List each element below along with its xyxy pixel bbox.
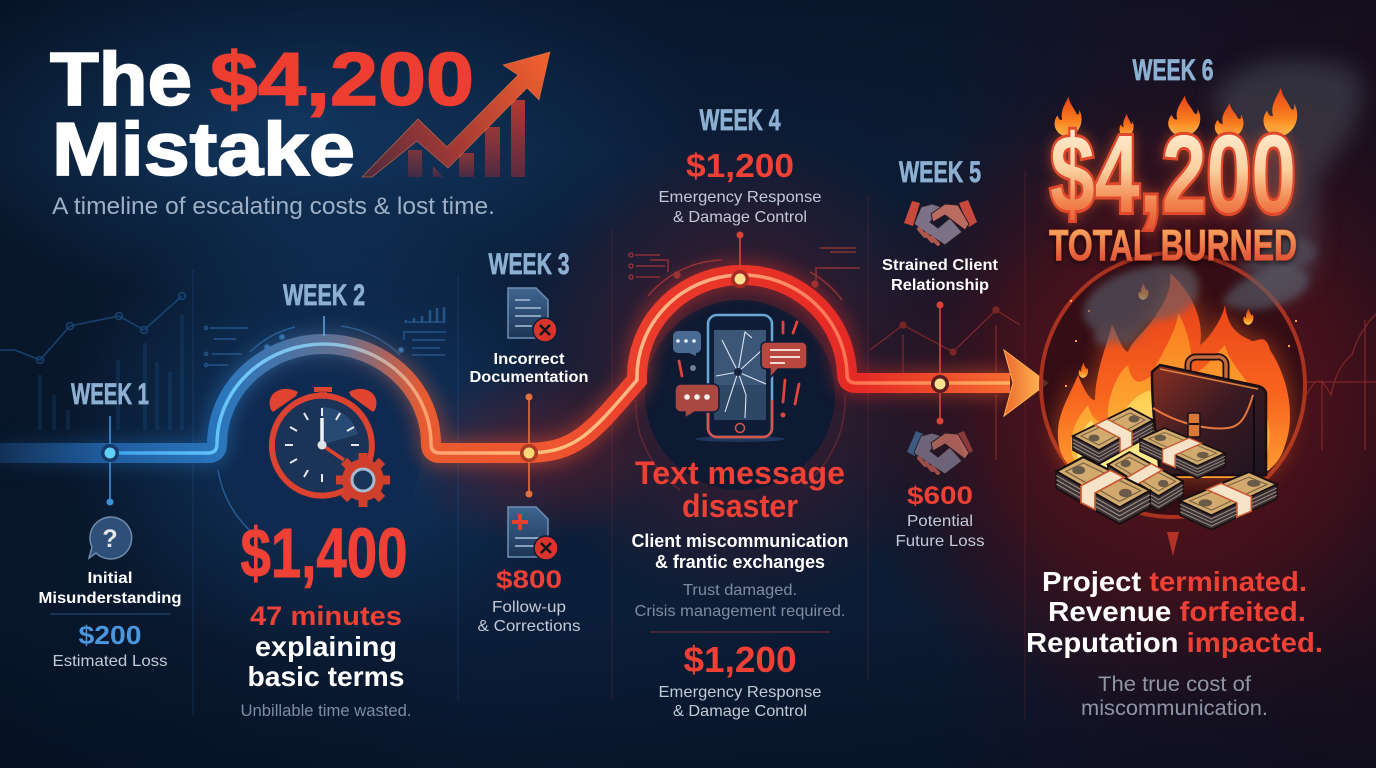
week 1: Estimated Loss xyxy=(52,653,168,670)
week 3 xyxy=(470,248,588,635)
icon: broken phone with chat bubbles xyxy=(673,315,807,442)
outcome text: Revenue forfeited. xyxy=(1048,596,1306,627)
node xyxy=(520,394,538,498)
week 3: Documentation xyxy=(470,369,588,386)
node xyxy=(101,416,119,506)
week 4: Emergency Response xyxy=(658,189,822,206)
title: $4,200 xyxy=(210,37,474,121)
icon: question bubble xyxy=(89,517,132,559)
icon: document with x xyxy=(508,288,557,342)
node xyxy=(931,302,949,424)
background chart: week 5 and 6 xyxy=(870,307,1376,460)
ring xyxy=(1041,253,1305,517)
background chart: week 4 xyxy=(629,248,860,490)
icon: clock with gear xyxy=(270,387,390,507)
week 2: WEEK 2 xyxy=(283,279,365,312)
icon: briefcase xyxy=(1152,357,1266,475)
week 2: basic terms xyxy=(248,661,404,692)
week 1: Initial xyxy=(88,570,132,587)
week 4: WEEK 4 xyxy=(700,104,781,137)
week 4: Trust damaged. xyxy=(683,582,797,599)
week 6: The true cost of xyxy=(1098,673,1251,696)
week 4: & frantic exchanges xyxy=(655,552,825,572)
week 5: Potential xyxy=(907,513,973,530)
week 5 xyxy=(882,156,999,550)
background chart: week 2 xyxy=(204,307,446,535)
icon: handshake faded xyxy=(907,431,973,474)
icon: money stacks xyxy=(1056,408,1277,530)
week 2 xyxy=(240,279,412,720)
week 4: disaster xyxy=(682,488,798,524)
week 1: WEEK 1 xyxy=(71,378,149,411)
icon: flames on total xyxy=(1055,88,1297,139)
week 4 xyxy=(632,104,848,720)
week 4: $1,200 xyxy=(684,639,796,680)
week 2: Unbillable time wasted. xyxy=(240,701,412,720)
week 1: $200 xyxy=(78,620,142,650)
title arrow graphic xyxy=(362,52,550,177)
week 4: Crisis management required. xyxy=(634,603,846,620)
title xyxy=(50,37,550,220)
week 3: Follow-up xyxy=(492,599,566,616)
subtitle: A timeline of escalating costs & lost time. xyxy=(52,193,495,220)
week 2: explaining xyxy=(255,631,397,662)
smoke top xyxy=(1215,60,1361,305)
icon: document with plus and x xyxy=(508,507,558,560)
timeline path xyxy=(0,275,1010,453)
week 4: Text message xyxy=(635,455,845,491)
week 6: WEEK 6 xyxy=(1132,54,1214,87)
smoke over flames xyxy=(1083,237,1318,345)
week 5: Relationship xyxy=(891,277,989,294)
icon: gear xyxy=(336,453,390,507)
week 1: Misunderstanding xyxy=(38,590,182,607)
week 2: 47 minutes xyxy=(250,601,402,631)
week 4: & Damage Control xyxy=(673,703,807,720)
outcome text: Project terminated. xyxy=(1042,566,1307,597)
week 4: Client miscommunication xyxy=(632,531,848,551)
week 6 xyxy=(1026,54,1361,720)
week 3: Incorrect xyxy=(494,351,565,368)
week 3: WEEK 3 xyxy=(488,248,570,281)
week 1 xyxy=(38,378,182,670)
title: Mistake xyxy=(52,107,355,191)
timeline arrow head xyxy=(1004,350,1048,416)
icon: handshake xyxy=(904,200,977,245)
icon: big flames xyxy=(1058,273,1297,478)
node xyxy=(731,232,749,288)
week 4: Emergency Response xyxy=(658,684,822,701)
week 4: & Damage Control xyxy=(673,209,807,226)
dark disc: clock xyxy=(227,358,421,552)
dark disc: phone xyxy=(645,300,835,490)
outcome text: Reputation impacted. xyxy=(1026,627,1323,658)
week 3: & Corrections xyxy=(478,618,580,635)
week 3: $800 xyxy=(496,566,562,594)
week 5: WEEK 5 xyxy=(899,156,981,189)
week 5: Strained Client xyxy=(882,257,999,274)
icon: question bubble: ? xyxy=(102,525,118,553)
week 2: $1,400 xyxy=(240,514,408,592)
outcome text xyxy=(1026,566,1323,658)
title text: The xyxy=(50,37,192,121)
week 5: $600 xyxy=(907,482,973,510)
week 6: miscommunication. xyxy=(1081,697,1268,720)
week 4: $1,200 xyxy=(686,147,794,184)
week 5: Future Loss xyxy=(896,533,984,550)
background chart: week 1 xyxy=(0,292,186,430)
